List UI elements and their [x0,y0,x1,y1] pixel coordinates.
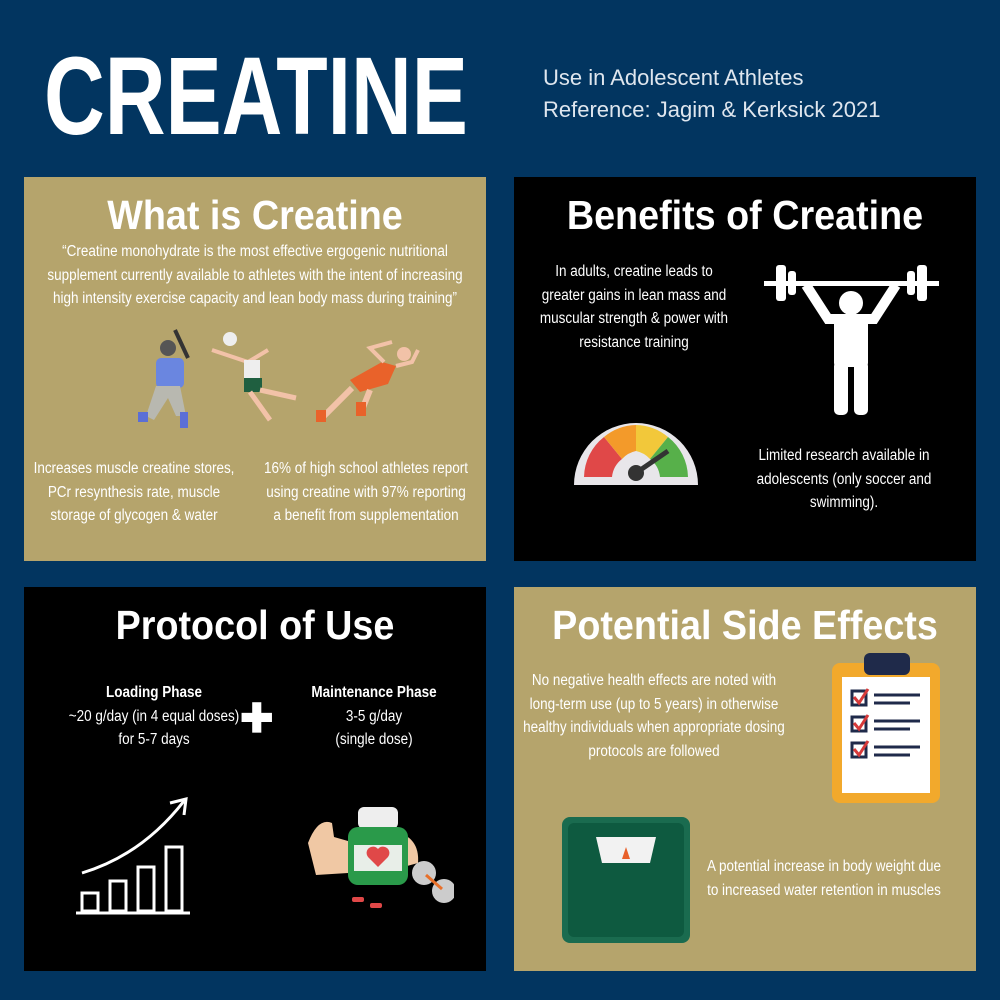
loading phase: Loading Phase [106,684,202,701]
heading: What is Creatine [107,192,403,238]
text: adults: In adults, creatine leads to [555,263,713,280]
text: adults: resistance training [579,334,689,350]
text: adolescents: Limited research available in [759,447,929,464]
subtitle [543,65,880,122]
text: muscle stores [34,460,234,524]
text: adults: greater gains in lean mass and [542,286,726,304]
quote [47,243,463,307]
maintenance phase: (single dose) [335,731,413,748]
maintenance phase: 3-5 g/day [346,708,402,724]
quote: “Creatine monohydrate is the most effective ergogenic nutritional [62,243,448,260]
icon: weightlifter [764,265,939,415]
text: body weight: to increased water retention in muscles [707,882,941,898]
panel: what is creatine [24,177,486,561]
text: body weight: A potential increase in body weight due [707,858,941,875]
loading phase: for 5-7 days [118,731,190,748]
maintenance phase: Maintenance Phase [311,684,437,701]
text: adults [540,263,728,350]
heading: Protocol of Use [116,602,394,648]
panel: side effects [514,587,976,971]
text: usage stats: 16% of high school athletes report [264,460,468,477]
subtitle: Reference: Jagim & Kerksick 2021 [543,97,880,122]
text: no negative effects [523,672,785,760]
text: usage stats: using creatine with 97% reporting [266,484,466,500]
icon: growth chart [76,797,190,914]
text: no negative effects: long-term use (up to 5 years) in otherwise [530,696,778,712]
loading phase [69,684,239,748]
text: muscle stores: PCr resynthesis rate, muscle [48,484,220,500]
text: no negative effects: healthy individuals when appropriate dosing [523,719,785,736]
heading: Benefits of Creatine [567,192,923,238]
title: CREATINE [44,35,468,158]
maintenance phase [311,684,437,748]
text: no negative effects: protocols are followed [588,742,720,760]
text: muscle stores: Increases muscle creatine stores, [34,460,234,477]
text: adolescents: adolescents (only soccer and [757,470,931,488]
icon: athletes [138,329,420,428]
text: body weight [707,858,941,898]
text: muscle stores: storage of glycogen & water [50,507,218,524]
icon: gauge [574,423,698,485]
loading phase: ~20 g/day (in 4 equal doses) [69,708,239,724]
text: usage stats [264,460,468,524]
icon: supplement bottle [308,807,454,908]
heading: Potential Side Effects [552,602,938,648]
icon: plus: ✚ [240,697,274,741]
icon: scale [562,817,690,943]
subtitle: Use in Adolescent Athletes [543,65,804,90]
text: adolescents [757,447,931,511]
text: no negative effects: No negative health effects are noted with [532,672,776,689]
panel: protocol [24,587,486,971]
text: adults: muscular strength & power with [540,310,728,327]
text: adolescents: swimming). [810,494,878,511]
text: usage stats: a benefit from supplementation [273,507,459,524]
panel: benefits [514,177,976,561]
quote: supplement currently available to athletes with the intent of increasing [47,266,463,284]
quote: high intensity exercise capacity and lean body mass during training” [53,290,457,307]
icon: clipboard [832,653,940,803]
